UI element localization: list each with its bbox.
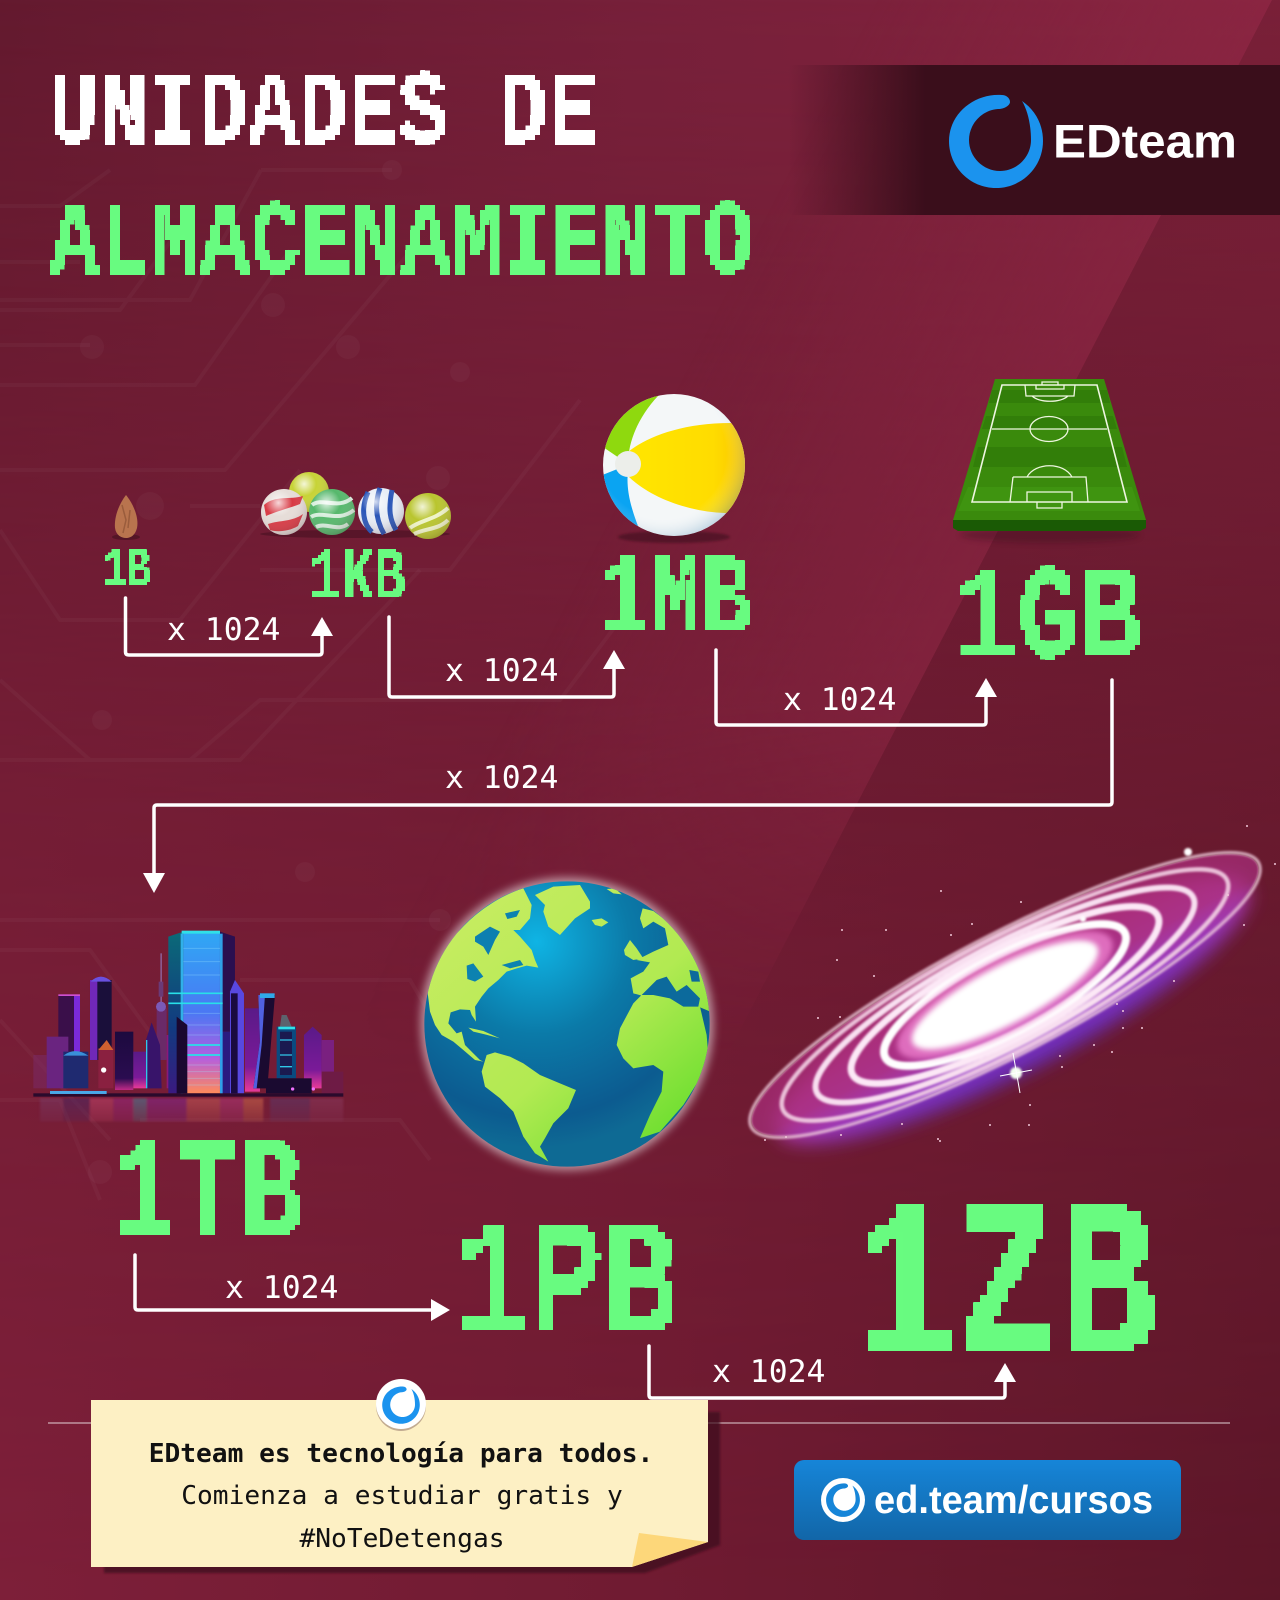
iceland <box>592 918 608 927</box>
note heading: EDteam es tecnología para todos. <box>149 1439 653 1469</box>
logo band <box>788 65 1280 215</box>
multiplier: x 1024 <box>167 612 280 648</box>
svalbard <box>607 888 622 894</box>
africa <box>617 992 708 1138</box>
label 1PB: 1PB <box>455 1196 678 1382</box>
hudson bay <box>475 927 500 955</box>
icon: globe <box>420 877 714 1171</box>
spire tower <box>146 953 177 1088</box>
label 1GB: 1GB <box>955 545 1142 698</box>
icon: almond <box>112 495 140 540</box>
marble green <box>309 489 355 535</box>
label 1TB: 1TB <box>112 1117 304 1278</box>
label 1KB: 1KB <box>309 537 406 620</box>
north america <box>427 888 538 1062</box>
note body: Comienza a estudiar gratis y <box>181 1481 623 1511</box>
logo wordmark: EDteam <box>1053 114 1237 168</box>
icon: marbles <box>260 472 451 539</box>
marble red <box>261 489 307 535</box>
mediterranean <box>642 970 700 1007</box>
marble blue <box>358 488 404 534</box>
british isles <box>624 940 643 960</box>
note fold <box>632 1533 708 1567</box>
arrow 1B to 1KB <box>126 598 333 655</box>
europe asia <box>631 908 711 1012</box>
label 1B: 1B <box>103 538 151 602</box>
note hashtag: #NoTeDetengas <box>300 1524 504 1554</box>
arrow 1MB to 1GB <box>716 650 997 725</box>
multiplier: x 1024 <box>783 682 896 718</box>
CTA button <box>794 1460 1181 1540</box>
multiplier: x 1024 <box>445 760 558 796</box>
button icon <box>821 1478 865 1522</box>
title line 2: ALMACENAMIENTO <box>49 185 753 305</box>
arrow 1GB to 1TB <box>143 680 1112 893</box>
button text: ed.team/cursos <box>874 1479 1153 1522</box>
note pin <box>376 1379 426 1431</box>
icon: beach ball <box>600 390 750 543</box>
right buildings <box>230 980 343 1093</box>
reflection <box>40 1098 343 1122</box>
sparkle star <box>1000 1053 1032 1093</box>
sticky note <box>91 1379 720 1573</box>
south america <box>482 1052 576 1162</box>
stars <box>764 825 1276 1142</box>
icon: city skyline <box>33 931 343 1122</box>
arrow 1TB to 1PB <box>135 1255 450 1321</box>
marble yellow front <box>405 493 451 539</box>
icon: galaxy <box>724 810 1280 1196</box>
multiplier: x 1024 <box>445 653 558 689</box>
lakes and gulf <box>467 910 523 982</box>
multiplier: x 1024 <box>225 1270 338 1306</box>
circuit pattern <box>0 160 620 1200</box>
left buildings <box>47 977 147 1090</box>
icon: soccer field <box>953 379 1146 543</box>
title <box>48 55 753 305</box>
arrow 1KB to 1MB <box>389 617 625 697</box>
label 1ZB: 1ZB <box>855 1167 1158 1420</box>
multiplier: x 1024 <box>712 1354 825 1390</box>
title line 1: UNIDADES DE <box>48 55 598 175</box>
footer divider <box>48 1422 1230 1424</box>
marble yellow back <box>289 472 329 512</box>
waterfront <box>33 1091 343 1097</box>
label 1MB: 1MB <box>599 538 752 667</box>
arrow 1PB to 1ZB <box>649 1346 1016 1398</box>
greenland <box>535 885 590 935</box>
caribbean islands <box>468 1028 500 1038</box>
tallest tower <box>168 931 235 1094</box>
icon: EDteam ring <box>949 95 1043 188</box>
